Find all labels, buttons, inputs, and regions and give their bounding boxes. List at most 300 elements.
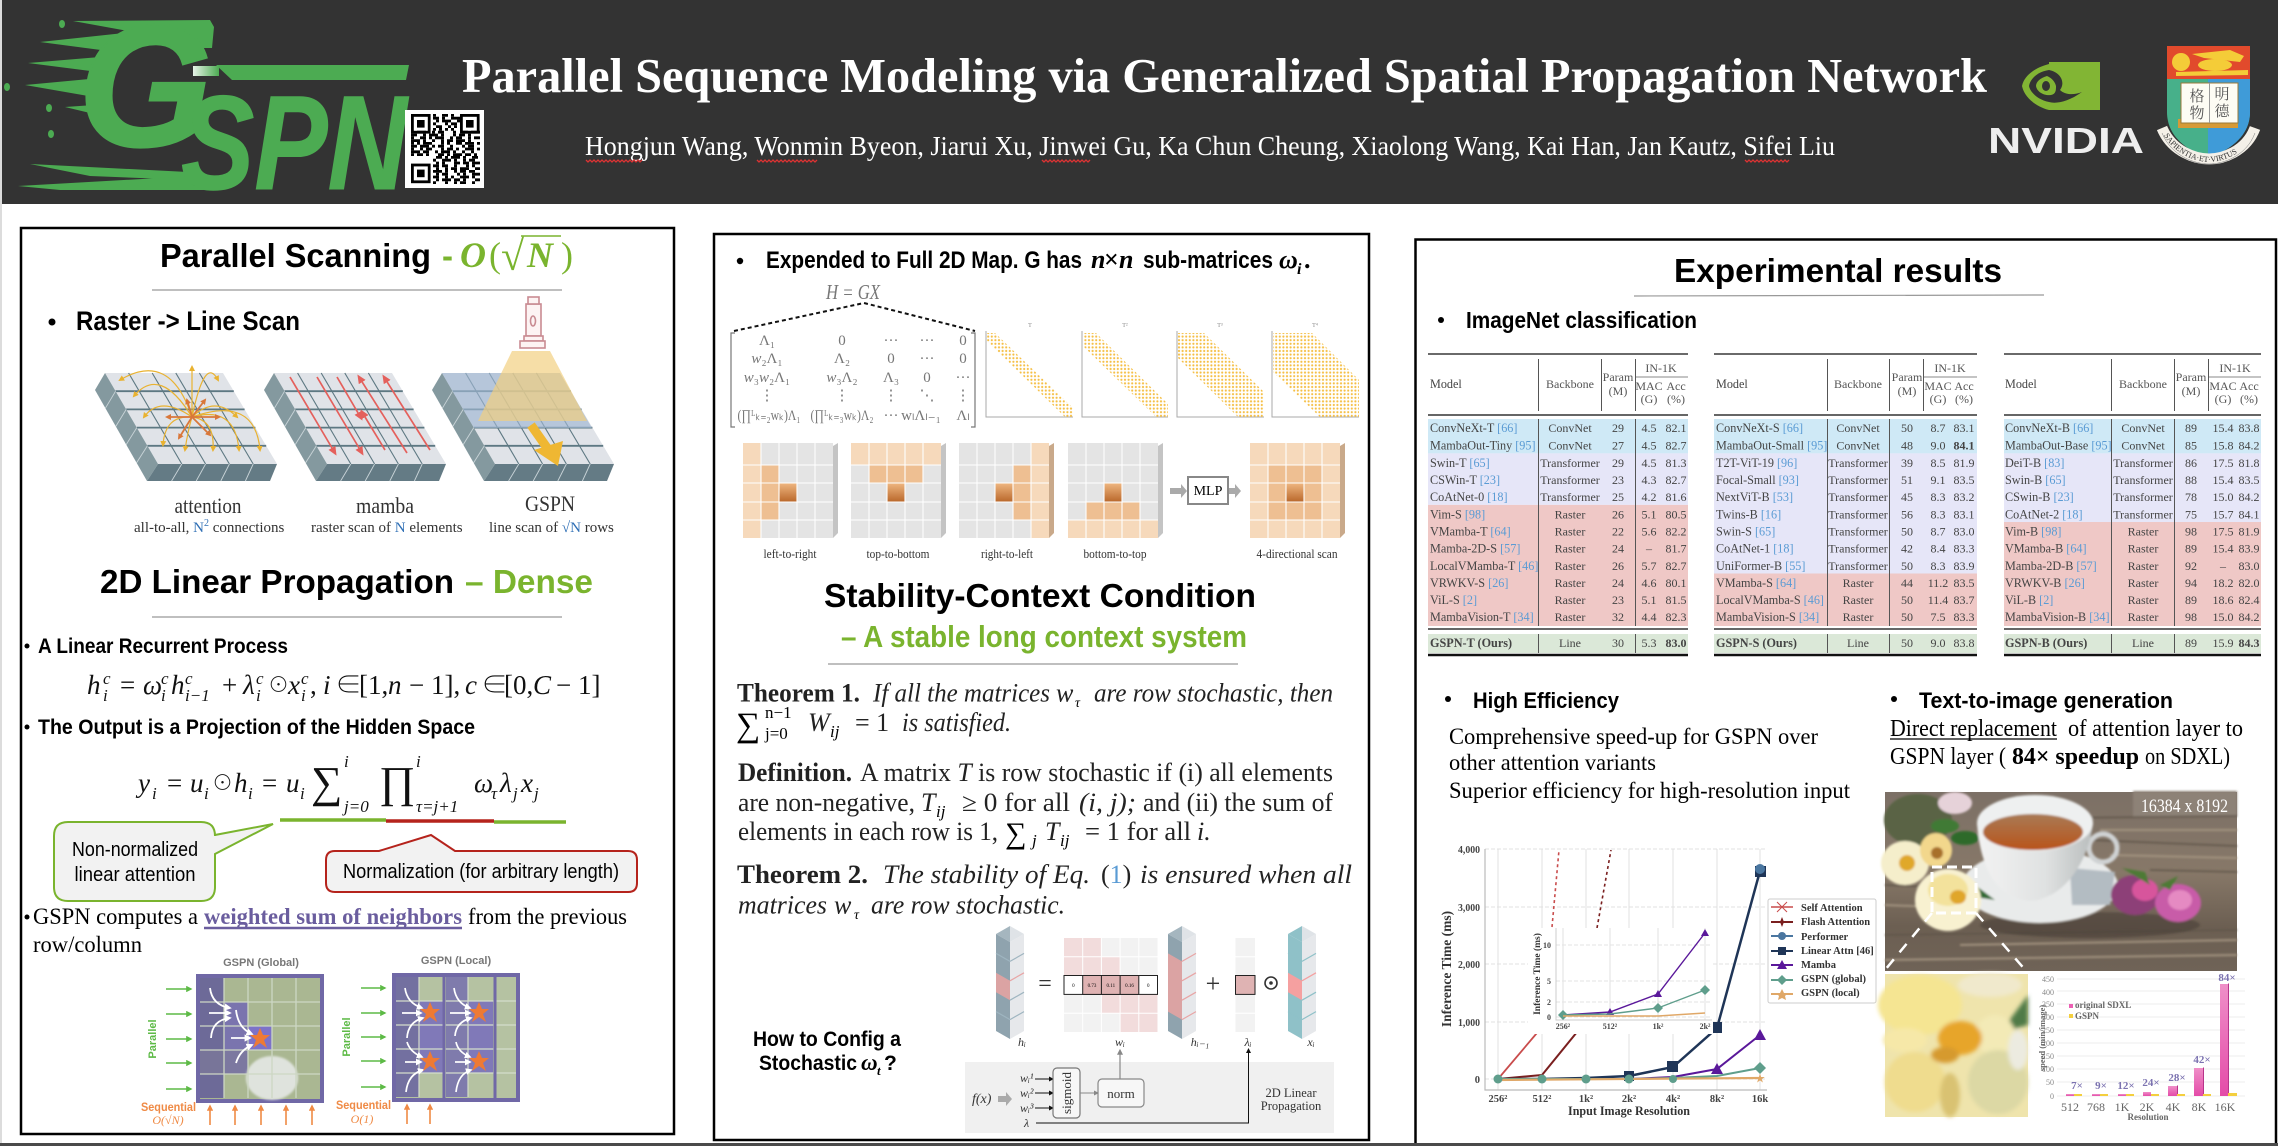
table: small models: Twins-B [16]	[1716, 508, 1781, 522]
table: small models: 83.1	[1954, 508, 1974, 522]
matrix: H = GX: ···	[920, 333, 934, 349]
text: definition: elements in each row is 1,	[738, 817, 998, 846]
table: tiny models: 25	[1612, 490, 1624, 504]
table: small models: Transformer	[1828, 508, 1888, 522]
table: tiny models: 30	[1612, 636, 1624, 650]
equation: output projection: u	[286, 768, 300, 798]
table: base models	[2004, 354, 2261, 655]
table: small models: 8.5	[1930, 456, 1946, 470]
table: small models: MambaOut-Small [95]	[1716, 438, 1827, 452]
table: base models: CoAtNet-2 [18]	[2005, 508, 2083, 522]
text block: weighted sum of neighbors: from the previous	[468, 904, 627, 929]
text: definition: j	[1030, 831, 1037, 850]
table: tiny models: 82.3	[1666, 610, 1686, 624]
text block: text-to-image generation: GSPN layer (	[1890, 744, 2006, 770]
table: base models: 18.2	[2212, 576, 2234, 590]
question: how to config a stochastic matrix: ?	[884, 1052, 897, 1075]
table: base models: Swin-B [65]	[2005, 473, 2066, 487]
matrix: w_i: 0.16	[1125, 984, 1134, 989]
table: base models: Mamba-2D-B [57]	[2005, 559, 2097, 573]
table: small models: Transformer	[1828, 524, 1888, 538]
table: base models: 89	[2185, 421, 2197, 435]
table: tiny models: Transformer	[1540, 490, 1600, 504]
logo: HKU crest: 物	[2189, 104, 2205, 122]
equation: output projection: =	[167, 768, 182, 798]
heading: parallel scanning: -	[442, 237, 453, 274]
table: base models: Model	[2005, 377, 2037, 391]
matrix: lambda_i	[1236, 938, 1255, 1032]
matrix: H = GX: w₃w₂Λ₁	[744, 370, 790, 386]
table: tiny models: 5.7	[1642, 559, 1656, 573]
equation: output projection: i	[416, 752, 421, 771]
table: tiny models: 81.5	[1666, 593, 1686, 607]
inset chart: 256²	[1556, 1022, 1571, 1031]
equation: output projection: i	[300, 784, 305, 803]
photo: generated tea cup at 16384 x 8192	[1881, 791, 2237, 972]
matrix: H = GX: ···	[956, 370, 970, 386]
table: small models: 50	[1901, 610, 1913, 624]
table: tiny models: Backbone	[1546, 377, 1594, 391]
table: small models: ConvNeXt-S [66]	[1716, 421, 1803, 435]
text block: text-to-image generation	[1890, 688, 2243, 770]
table: base models: 98	[2185, 524, 2197, 538]
table: small models: 83.3	[1954, 610, 1974, 624]
table: base models: –	[2219, 559, 2227, 573]
bullet: expended to full 2D map: ×	[1104, 245, 1119, 274]
table: base models: Raster	[2128, 524, 2158, 538]
matrix: H = GX: ⋮	[834, 388, 850, 404]
charts: band matrices: T³	[1217, 323, 1223, 329]
equation: hidden state recurrence: 1]	[578, 670, 600, 700]
table: tiny models: MambaVision-T [34]	[1430, 610, 1534, 624]
text: theorem 1: j=0	[764, 724, 788, 743]
table: base models: 92	[2185, 559, 2197, 573]
table: small models: (M)	[1898, 384, 1916, 398]
table: small models: Transformer	[1828, 490, 1888, 504]
table: tiny models: Param	[1603, 370, 1634, 384]
table: tiny models: Mamba-2D-S [57]	[1430, 542, 1520, 556]
diagram: weight generation flow: 2D Linear	[1265, 1086, 1317, 1100]
text: definition: = 1 for all	[1085, 817, 1191, 846]
text block: text-to-image generation: Text-to-image generation	[1919, 688, 2173, 713]
chart: SDXL speed by resolution: 350	[2042, 1000, 2054, 1009]
chart: inference time: 512²	[1533, 1094, 1551, 1105]
chart: SDXL speed by resolution: 9×	[2095, 1080, 2107, 1092]
equation: hidden state recurrence: h	[171, 670, 184, 700]
diagram: GSPN global: Sequential	[141, 1100, 196, 1114]
table: small models: IN-1K	[1934, 361, 1966, 375]
text: definition: ≥ 0 for all	[962, 788, 1070, 817]
equation: output projection: λ	[499, 768, 512, 798]
chart: inference time: 1k²	[1579, 1094, 1593, 1105]
table: base models: 83.0	[2238, 559, 2260, 573]
text block: high efficiency: Superior efficiency for high-resolution input	[1449, 778, 1851, 803]
table: small models: Raster	[1843, 593, 1873, 607]
chart: SDXL speed by resolution: speed (min/image)	[2037, 1005, 2047, 1071]
text: theorem 1: w	[1056, 678, 1074, 708]
table: tiny models: 27	[1612, 438, 1624, 452]
table: base models: 98	[2185, 610, 2197, 624]
text: theorem 1: n−1	[765, 703, 792, 722]
text: definition: are non-negative,	[738, 788, 915, 817]
matrix: H = GX: ⋮	[760, 388, 774, 404]
matrix: H = GX: Λₗ	[956, 408, 970, 424]
table: tiny models: (%)	[1667, 392, 1685, 406]
text: theorem 1: ij	[830, 722, 840, 741]
callout: normalization: Normalization (for arbitrary length)	[343, 861, 619, 883]
captions: attention, mamba, GSPN	[134, 491, 614, 536]
table: tiny models: 4.5	[1642, 421, 1656, 435]
heading: experimental results: Experimental results	[1674, 252, 2002, 289]
logo: HKU crest	[2157, 46, 2260, 164]
text: definition: ij	[1060, 831, 1070, 850]
question: how to config a stochastic matrix: How to Config a	[753, 1028, 901, 1051]
text: definition: ij	[936, 802, 946, 821]
table: small models: NextViT-B [53]	[1716, 490, 1793, 504]
table: small models: Model	[1716, 377, 1748, 391]
scan captions	[764, 546, 1338, 561]
equation: hidden state recurrence: ⊙	[268, 673, 289, 697]
diagram: MLP with arrows: MLP	[1194, 484, 1223, 499]
table: tiny models: ConvNet	[1548, 438, 1592, 452]
equation: output projection: i	[152, 784, 157, 803]
chart: SDXL speed by resolution: 400	[2042, 988, 2054, 997]
table: small models: 48	[1901, 438, 1913, 452]
equation: hidden state recurrence: c	[301, 669, 309, 688]
table: base models: 83.5	[2238, 473, 2260, 487]
table: base models: 15.4	[2212, 542, 2234, 556]
table: small models: 83.5	[1954, 576, 1974, 590]
table: tiny models: Raster	[1555, 542, 1585, 556]
table: base models: ViL-B [2]	[2005, 593, 2053, 607]
chart: inference time: 2k²	[1622, 1094, 1636, 1105]
diagram: weight generation flow: wᵢ²	[1020, 1086, 1034, 1100]
table: base models: MAC	[2209, 379, 2237, 393]
chart: SDXL speed by resolution: 300	[2042, 1013, 2054, 1022]
question: how to config a stochastic matrix: t	[877, 1063, 881, 1078]
text block: high efficiency: other attention variants	[1449, 750, 1656, 775]
table: tiny models	[1428, 354, 1688, 655]
logo: HKU crest: 格	[2189, 87, 2205, 105]
table: tiny models: 82.1	[1666, 421, 1686, 435]
table: base models: Line	[2132, 636, 2154, 650]
equation: hidden state recurrence: i	[301, 686, 306, 705]
table: base models: 15.0	[2212, 490, 2234, 504]
panel: experimental results	[1416, 240, 2276, 1143]
table: tiny models: 4.6	[1642, 576, 1656, 590]
captions: attention, mamba, GSPN: raster scan of N elements	[311, 520, 463, 536]
table: small models: 8.7	[1930, 421, 1946, 435]
logo: GSPN: SPN	[181, 69, 410, 218]
equation: hidden state recurrence: i	[161, 686, 166, 705]
equation: hidden state recurrence: λ	[242, 670, 255, 700]
table: small models: Transformer	[1828, 559, 1888, 573]
table: tiny models: ConvNet	[1548, 421, 1592, 435]
chart: SDXL speed by resolution: 150	[2042, 1052, 2054, 1061]
table: small models: Transformer	[1828, 456, 1888, 470]
chart legend: Self Attention	[1801, 903, 1863, 914]
table: small models: 83.8	[1954, 636, 1974, 650]
table: tiny models: GSPN-T (Ours)	[1430, 636, 1512, 650]
equation: output projection: u	[190, 768, 204, 798]
table: base models: 17.5	[2212, 524, 2234, 538]
text block: text-to-image generation: of attention layer to	[2068, 716, 2243, 742]
text: theorem 1: is satisfied.	[902, 708, 1011, 737]
table: base models: Raster	[2128, 576, 2158, 590]
table: small models: MambaVision-S [34]	[1716, 610, 1819, 624]
table: tiny models: 4.5	[1642, 438, 1656, 452]
table: small models: 42	[1901, 542, 1913, 556]
diagram: MLP with arrows	[1170, 477, 1241, 504]
diagram: GSPN local	[336, 955, 518, 1126]
table: tiny models: Raster	[1555, 593, 1585, 607]
equation: hidden state recurrence: c	[103, 669, 111, 688]
table: small models: 9.0	[1930, 636, 1946, 650]
text: theorem 1	[736, 678, 1333, 744]
column labels: xᵢ	[1306, 1035, 1315, 1049]
question: how to config a stochastic matrix: ω	[861, 1050, 878, 1075]
table: small models: Transformer	[1828, 473, 1888, 487]
equation: output projection: ⊙	[212, 771, 233, 795]
table: small models: 9.1	[1930, 473, 1946, 487]
matrix: w_i: 0.11	[1107, 984, 1116, 989]
captions: attention, mamba, GSPN: connections	[209, 520, 285, 536]
table: tiny models: 23	[1612, 473, 1624, 487]
text block: high efficiency	[1445, 688, 1851, 803]
matrix: H = GX: w₃Λ₂	[826, 370, 858, 386]
icon: line-scan lamp	[520, 297, 545, 348]
table: base models: 89	[2185, 593, 2197, 607]
heading: stability-context condition	[824, 577, 1256, 654]
matrix: H = GX: Λ₂	[834, 351, 850, 367]
table: small models: 39	[1901, 456, 1913, 470]
table: base models: 84.2	[2238, 610, 2260, 624]
table: tiny models: 26	[1612, 559, 1624, 573]
table: small models: Acc	[1954, 379, 1974, 393]
equation: hidden state recurrence: i−1	[185, 686, 210, 705]
text: theorem 1: If all the matrices	[872, 678, 1050, 708]
diagram: GSPN global: Parallel	[147, 1019, 159, 1059]
chart legend	[1768, 899, 1876, 1003]
table: base models: VRWKV-B [26]	[2005, 576, 2085, 590]
diagram: weight generation flow: Propagation	[1261, 1099, 1322, 1113]
table: small models: (%)	[1955, 392, 1973, 406]
table: tiny models: VMamba-T [64]	[1430, 524, 1511, 538]
table: small models: (G)	[1930, 392, 1946, 406]
matrix: w_i: 0	[1147, 984, 1150, 989]
chart: SDXL speed by resolution: 16K	[2215, 1100, 2236, 1114]
logo: HKU crest: 明	[2214, 86, 2230, 103]
table: base models: 81.8	[2238, 456, 2260, 470]
table: tiny models: 29	[1612, 456, 1624, 470]
captions: attention, mamba, GSPN: all-to-all, N	[134, 520, 204, 536]
matrix: H = GX: 0	[959, 333, 967, 349]
table: base models: Raster	[2128, 559, 2158, 573]
table: tiny models: 24	[1612, 576, 1624, 590]
table: base models: Param	[2176, 370, 2207, 384]
matrix: H = GX: ···	[884, 408, 898, 424]
diagram: left-to-right scan	[743, 443, 838, 538]
heading: parallel scanning: √	[501, 234, 525, 280]
table: base models: Raster	[2128, 542, 2158, 556]
table: tiny models: 5.1	[1642, 593, 1656, 607]
equation: hidden state recurrence	[87, 669, 600, 705]
table: base models: 83.8	[2238, 421, 2260, 435]
table: base models: Transformer	[2113, 490, 2173, 504]
equation: hidden state recurrence: 1],	[431, 670, 460, 700]
bullet: expended to full 2D map: ω	[1279, 245, 1298, 274]
chart: inference time: 1,000	[1458, 1018, 1480, 1029]
table: small models: 50	[1901, 636, 1913, 650]
scan captions: top-to-bottom	[866, 546, 930, 561]
chart: SDXL speed by resolution: 450	[2042, 975, 2054, 984]
table: tiny models: 29	[1612, 421, 1624, 435]
equation: output projection: h	[234, 768, 248, 798]
table: small models: ConvNet	[1836, 421, 1880, 435]
table: base models: 84.1	[2238, 508, 2260, 522]
table: base models: 15.9	[2212, 636, 2234, 650]
equation: output projection: j	[532, 784, 539, 803]
table: tiny models: Raster	[1555, 508, 1585, 522]
equation: hidden state recurrence: ∈	[335, 670, 362, 700]
chart: SDXL speed by resolution: 42×	[2193, 1054, 2211, 1066]
table: small models: 84.1	[1954, 438, 1974, 452]
inset chart	[1528, 928, 1713, 1034]
table: base models: 94	[2185, 576, 2197, 590]
table: small models: 50	[1901, 524, 1913, 538]
diagram: weight generation flow: λ	[1023, 1116, 1029, 1130]
equation: hidden state recurrence: ∈	[481, 670, 508, 700]
table: tiny models: Raster	[1555, 559, 1585, 573]
table: small models: LocalVMamba-S [46]	[1716, 593, 1824, 607]
text: theorem 2	[737, 860, 1352, 923]
text: definition: Definition.	[738, 758, 852, 787]
table: tiny models: Swin-T [65]	[1430, 456, 1490, 470]
inset chart: 2	[1547, 998, 1551, 1007]
table: tiny models: (G)	[1641, 392, 1657, 406]
chart: SDXL speed by resolution: GSPN	[2075, 1011, 2100, 1021]
chart: SDXL speed by resolution: 28×	[2168, 1072, 2186, 1084]
inset chart: 10	[1543, 941, 1551, 950]
chart: SDXL speed by resolution: 7×	[2071, 1080, 2083, 1092]
chart: SDXL speed by resolution: 2K	[2140, 1100, 2155, 1114]
table: tiny models: 81.6	[1666, 490, 1686, 504]
equation: hidden state recurrence: ω	[143, 670, 162, 700]
table: base models: 15.4	[2212, 421, 2234, 435]
table: small models: 45	[1901, 490, 1913, 504]
question: how to config a stochastic matrix: Stochastic	[759, 1052, 857, 1075]
text block: high efficiency: Comprehensive speed-up for GSPN over	[1449, 724, 1818, 749]
diagram: GSPN line scan grid	[432, 297, 614, 481]
table: tiny models: 80.5	[1666, 508, 1686, 522]
table: base models: 82.4	[2238, 593, 2260, 607]
matrix: H = GX: 0	[959, 351, 967, 367]
diagram: 4-directional scan	[1250, 443, 1345, 538]
matrix: H = GX: (∏ᴸₖ₌₂wₖ)Λ₁	[738, 408, 800, 424]
column labels: wᵢ	[1115, 1035, 1125, 1049]
diagram: weight generation flow: sigmoid	[1059, 1072, 1074, 1114]
text: definition: A matrix T is row stochastic if (i) all elements	[860, 758, 1333, 787]
table: tiny models: Transformer	[1540, 456, 1600, 470]
table: base models: VMamba-B [64]	[2005, 542, 2087, 556]
chart legend: GSPN (local)	[1801, 988, 1860, 999]
diagram: column x_i	[1288, 926, 1316, 1039]
table: tiny models: 4.4	[1642, 610, 1656, 624]
equation: hidden state recurrence: c	[465, 670, 477, 700]
table: base models: 82.0	[2238, 576, 2260, 590]
chart: inference time: 3,000	[1458, 903, 1480, 914]
table: tiny models: 32	[1612, 610, 1624, 624]
heading: stability-context condition: – A stable long context system	[841, 619, 1247, 654]
table: tiny models: CoAtNet-0 [18]	[1430, 490, 1508, 504]
table: small models: 8.4	[1930, 542, 1946, 556]
text block: text-to-image generation: Direct replacement	[1890, 716, 2057, 742]
table: base models: DeiT-B [83]	[2005, 456, 2064, 470]
table: base models: 15.8	[2212, 438, 2234, 452]
chart: SDXL speed by resolution: 12×	[2117, 1080, 2135, 1092]
scan captions: bottom-to-top	[1084, 546, 1146, 561]
spell-check underlines	[586, 160, 1789, 162]
text block: high efficiency: High Efficiency	[1473, 688, 1620, 713]
table: base models: 89	[2185, 542, 2197, 556]
table: small models: 83.5	[1954, 473, 1974, 487]
table: tiny models: 4.2	[1642, 490, 1656, 504]
equation: hidden state recurrence: −	[556, 670, 571, 700]
bullet: expended to full 2D map: sub-matrices	[1143, 247, 1273, 274]
text: theorem 1: ∑	[736, 707, 760, 744]
table: tiny models: IN-1K	[1645, 361, 1677, 375]
table: base models: 15.7	[2212, 508, 2234, 522]
diagram: right-to-left scan	[959, 443, 1054, 538]
inset chart: Inference Time (ms)	[1532, 933, 1543, 1015]
equation: output projection: j	[511, 784, 518, 803]
equation: hidden state recurrence: x	[287, 670, 300, 700]
title: Parallel Sequence Modeling via Generalized Spatial Propagation Network	[462, 48, 1988, 103]
equation: hidden state recurrence: c	[161, 669, 169, 688]
logo: NVIDIA: NVIDIA	[1988, 120, 2144, 161]
chart legend: Flash Attention	[1801, 917, 1870, 928]
charts: band matrices: T⁴	[1312, 323, 1318, 329]
table: small models: 8.7	[1930, 524, 1946, 538]
text: theorem 1: = 1	[855, 708, 889, 737]
table: small models: Focal-Small [93]	[1716, 473, 1799, 487]
equation: hidden state recurrence: i	[256, 686, 261, 705]
table: small models: 50	[1901, 593, 1913, 607]
captions: attention, mamba, GSPN: line scan of √N rows	[489, 520, 614, 536]
table: tiny models: 26	[1612, 508, 1624, 522]
equation: hidden state recurrence: C	[533, 670, 552, 700]
equation: hidden state recurrence: h	[87, 670, 100, 700]
equation: output projection: ω	[474, 768, 493, 798]
heading: parallel scanning	[160, 234, 573, 280]
table: small models: Line	[1847, 636, 1869, 650]
chart: SDXL speed by resolution: 768	[2087, 1100, 2105, 1114]
authors: Hongjun Wang, Wonmin Byeon, Jiarui Xu, Jinwei Gu, Ka Chun Cheung, Xiaolong Wang, Kai Han, Jan Kautz, Sifei Liu	[585, 131, 1835, 161]
table: base models: Acc	[2239, 379, 2259, 393]
table: base models: 75	[2185, 508, 2197, 522]
table: base models: 83.9	[2238, 542, 2260, 556]
captions: attention, mamba, GSPN: attention	[174, 493, 242, 518]
table: small models: Backbone	[1834, 377, 1882, 391]
equation: hidden state recurrence: c	[185, 669, 193, 688]
chart: SDXL speed by resolution	[2037, 972, 2245, 1122]
callout: non-normalized linear attention: Non-normalized	[72, 839, 198, 861]
chart: SDXL speed by resolution: 4K	[2166, 1100, 2181, 1114]
chart: SDXL speed by resolution: 8K	[2192, 1100, 2207, 1114]
table: tiny models: VRWKV-S [26]	[1430, 576, 1508, 590]
table: tiny models: Raster	[1555, 610, 1585, 624]
text: theorem 1: τ	[1075, 696, 1081, 711]
